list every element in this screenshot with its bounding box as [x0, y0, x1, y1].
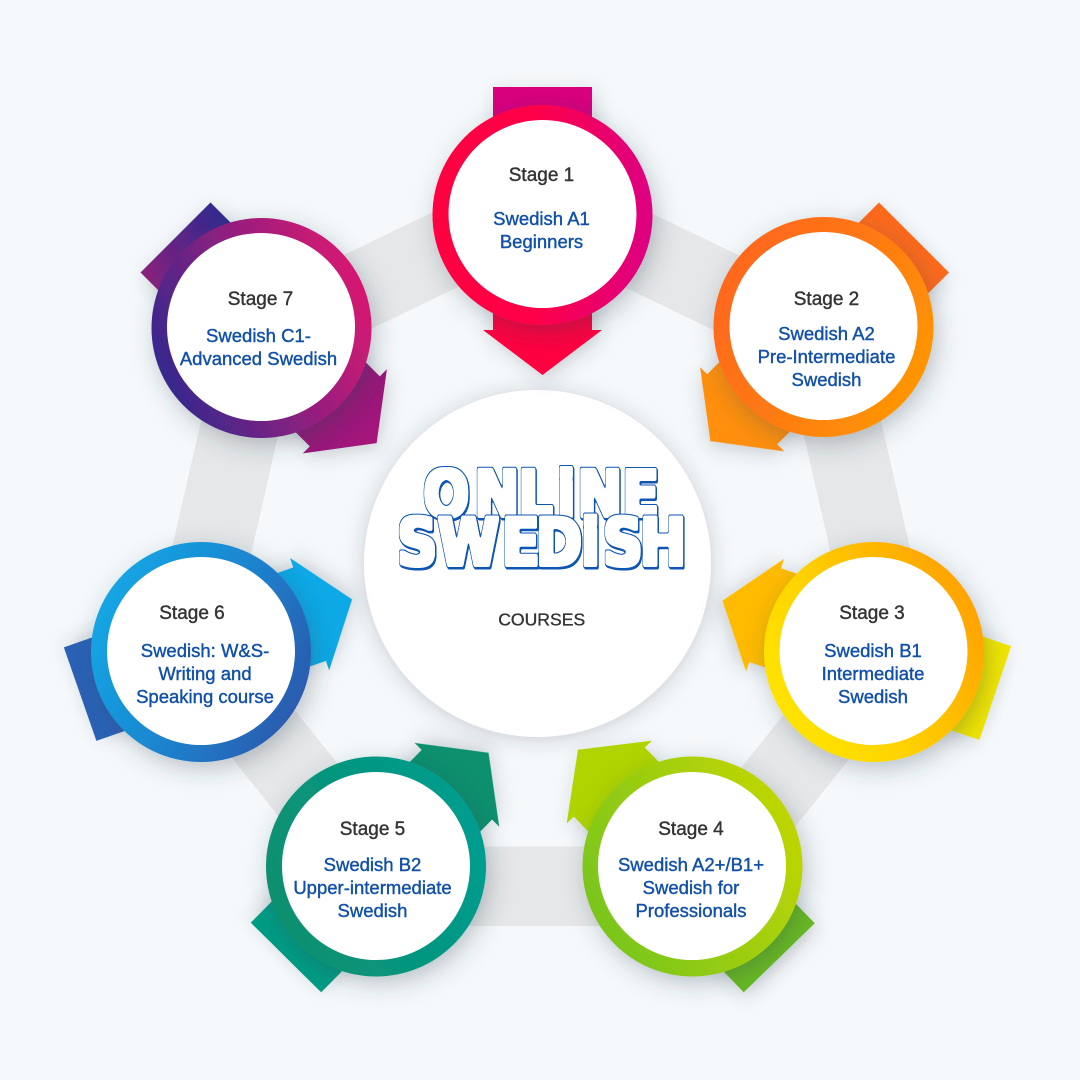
stage 4	[535, 708, 815, 992]
ring: stage 6	[91, 542, 311, 762]
label: stage 7: Stage 7	[228, 289, 293, 310]
inner circle: stage 4	[598, 772, 786, 960]
label: stage 1: Stage 1	[509, 165, 574, 186]
course: Swedish A2: Swedish	[792, 369, 861, 390]
courses label: COURSES	[498, 610, 585, 630]
course: Swedish B2: Swedish	[338, 900, 407, 921]
arrow: stage 5	[244, 711, 531, 999]
course: Swedish W&S: Speaking course	[136, 686, 274, 707]
ring: stage 5	[266, 756, 486, 976]
stage 7	[140, 202, 419, 485]
inner circle: stage 5	[282, 772, 470, 960]
arrow: stage 7	[140, 202, 419, 485]
label: stage 6: Stage 6	[159, 603, 225, 624]
inner circle: stage 2	[730, 232, 918, 420]
logo: online swedish: SWEDiSH	[397, 506, 686, 581]
ring: stage 1	[432, 105, 652, 325]
inner circle: stage 1	[448, 120, 636, 308]
logo: online swedish	[397, 458, 686, 581]
ring: stage 4	[582, 756, 802, 976]
course: Swedish A1: Swedish A1	[493, 208, 590, 229]
course: Swedish B1: Swedish	[838, 686, 908, 707]
course: Swedish A2: Swedish A2	[778, 323, 875, 344]
course: Swedish A2: Pre-Intermediate	[758, 346, 895, 367]
label: stage 2: Stage 2	[794, 289, 859, 310]
course: Swedish W&S: Writing and	[158, 663, 252, 684]
course: Swedish B1: Swedish B1	[824, 640, 922, 661]
course: Swedish W&S: Swedish: W&S-	[141, 640, 269, 661]
arrow: stage 3	[703, 544, 1014, 749]
course: Swedish B2: Swedish B2	[324, 854, 421, 875]
course: Swedish A2+/B1+: Swedish A2+/B1+	[618, 854, 764, 875]
ring: stage 7	[152, 218, 372, 438]
course: Swedish C1: Swedish C1-	[206, 325, 311, 346]
connecting heptagon band	[148, 160, 934, 926]
course: Swedish B2: Upper-intermediate	[293, 877, 452, 898]
arrow: stage 6	[61, 543, 372, 750]
logo: online swedish: ONLiNE	[423, 458, 659, 531]
center circle: online swedish courses	[364, 390, 711, 737]
course: Swedish C1: Advanced Swedish	[180, 348, 337, 369]
inner circle: stage 3	[780, 557, 968, 745]
stage 6	[61, 542, 372, 762]
label: stage 4: Stage 4	[658, 819, 724, 840]
course: Swedish A2+/B1+: Professionals	[635, 900, 747, 921]
label: stage 5: Stage 5	[340, 819, 405, 840]
course: Swedish A1: Beginners	[500, 231, 583, 252]
ring: stage 3	[764, 542, 984, 762]
ring: stage 2	[714, 217, 934, 437]
label: stage 3: Stage 3	[839, 603, 905, 624]
stage 1	[432, 87, 652, 375]
course: Swedish A2+/B1+: Swedish for	[643, 877, 739, 898]
arrow: stage 1	[483, 87, 602, 375]
arrow: stage 2	[668, 195, 956, 483]
stage 5	[244, 711, 531, 999]
course: Swedish B1: Intermediate	[822, 663, 924, 684]
stage 2	[668, 195, 956, 483]
inner circle: stage 6	[107, 557, 295, 745]
stage 3	[703, 542, 1014, 762]
inner circle: stage 7	[167, 233, 355, 421]
arrow: stage 4	[535, 708, 815, 992]
